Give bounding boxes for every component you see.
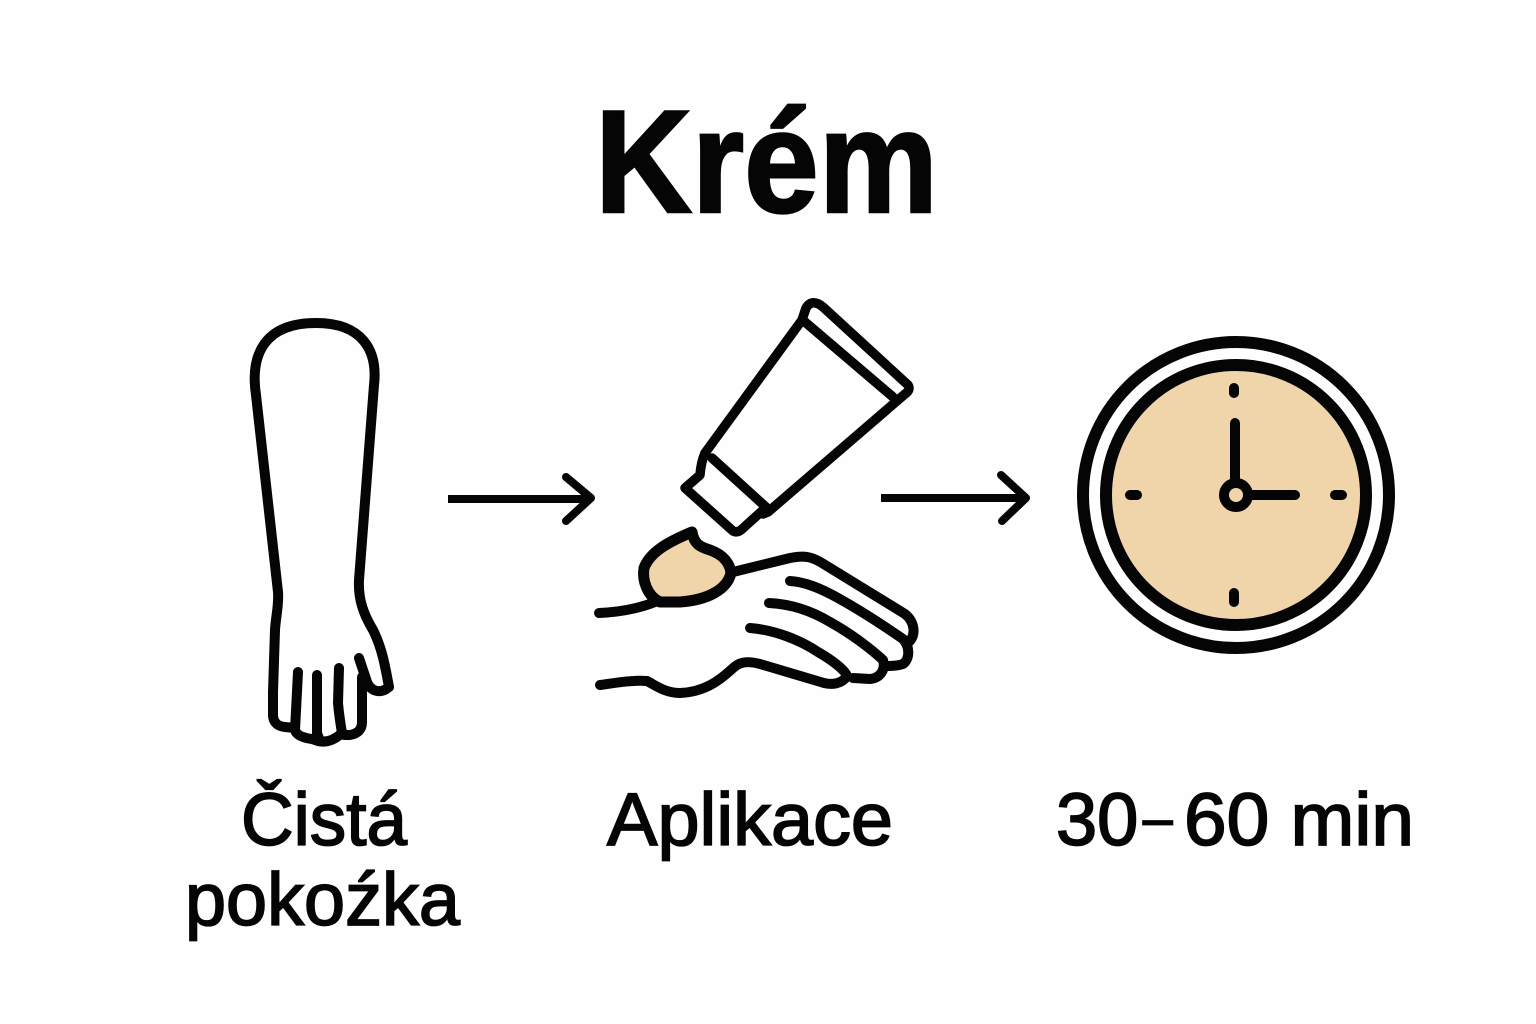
hand outline bbox=[599, 557, 914, 693]
icon: bare arm bbox=[255, 323, 389, 742]
label: duration: 60 min bbox=[1184, 778, 1414, 861]
label: application: Aplikace bbox=[607, 778, 893, 861]
clock rings bbox=[1083, 342, 1389, 648]
icon: hand with cream dollop bbox=[599, 532, 914, 693]
arrow: application to waiting bbox=[881, 475, 1026, 521]
label: duration: 30 bbox=[1056, 778, 1138, 861]
label: duration: – bbox=[1143, 789, 1173, 848]
icon: clock bbox=[1083, 342, 1389, 648]
arrow: skin to application bbox=[448, 477, 591, 521]
cream dollop bbox=[644, 532, 731, 602]
clock face bbox=[1112, 371, 1360, 619]
title: Krém bbox=[595, 80, 938, 243]
label: clean skin: Čistá bbox=[241, 778, 408, 861]
label: clean skin bbox=[185, 778, 461, 941]
clock ticks bbox=[1130, 388, 1342, 602]
label: clean skin: pokoźka bbox=[185, 858, 461, 941]
icon: cream tube bbox=[685, 303, 909, 532]
clock hands bbox=[1224, 423, 1295, 507]
